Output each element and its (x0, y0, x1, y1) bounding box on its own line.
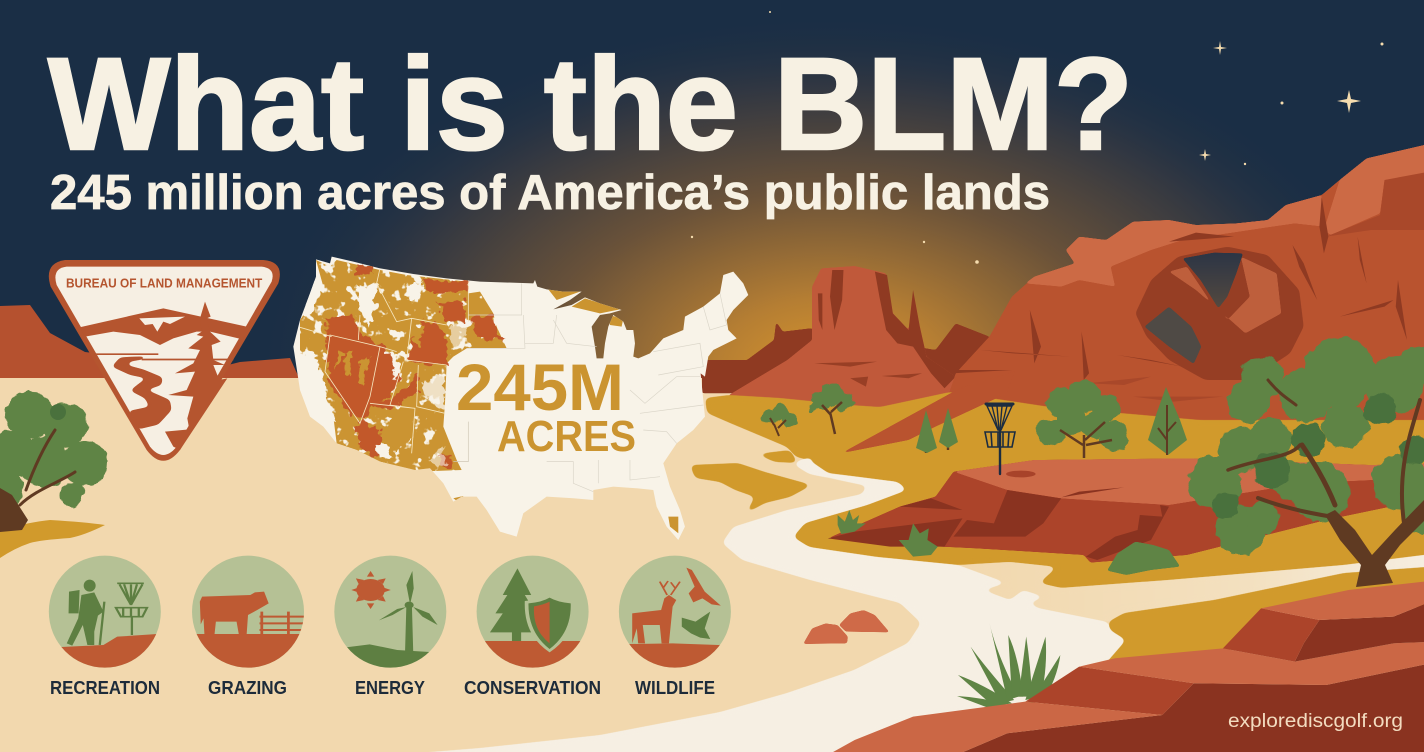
tree: pair of pines (916, 408, 958, 453)
white gaps (303, 280, 467, 470)
western state lines (300, 268, 468, 453)
tree: oak (1036, 380, 1129, 458)
gold northern Great Lakes (453, 289, 678, 533)
label: wildlife: WILDLIFE (635, 678, 715, 698)
land use icons row (48, 556, 737, 698)
tree: conifer right (1148, 387, 1187, 455)
disc golf basket target (985, 404, 1015, 474)
label: grazing: GRAZING (208, 678, 287, 698)
icon: conservation (476, 556, 589, 668)
arch opening lower (1144, 307, 1201, 364)
tree: far small left (763, 404, 797, 436)
logo lines (95, 353, 233, 360)
icon: wildlife (618, 556, 731, 668)
title: What is the BLM? (48, 30, 1133, 177)
BLM shield logo (49, 260, 280, 461)
logo snowcap (139, 317, 185, 332)
gold blob on sand (690, 463, 812, 514)
label: recreation: RECREATION (50, 678, 160, 698)
USA map (293, 257, 748, 540)
trunk (1325, 500, 1424, 587)
rock body (944, 142, 1424, 440)
icon: grazing (192, 556, 304, 668)
map figure: 245M: 245M (456, 350, 624, 424)
stars (691, 11, 1384, 264)
plateau body (828, 458, 1424, 563)
rust slope behind pines (841, 370, 1016, 453)
small gold patch by river (756, 450, 798, 463)
night sky background (0, 0, 1424, 420)
mid ground golden land (705, 392, 1424, 588)
plateau shadow (828, 487, 1169, 560)
eastern state lines (467, 283, 727, 492)
left gold patch (0, 520, 105, 558)
sunset glow (150, 0, 1424, 420)
land outline (293, 257, 748, 540)
cracks (953, 197, 1407, 380)
arch opening upper (1182, 253, 1243, 308)
logo mountains (79, 308, 250, 345)
icon: energy (333, 556, 450, 672)
lit upper faces (1025, 195, 1324, 287)
river main (380, 418, 1126, 752)
agave plant (957, 623, 1060, 708)
shaded arch interior (1135, 247, 1304, 380)
horizon band behind map (680, 360, 800, 380)
large foreground tree (1188, 336, 1424, 587)
logo agency name: BUREAU OF LAND MANAGEMENT (66, 277, 263, 291)
far mesa (702, 322, 989, 393)
left horizon mesa (0, 305, 300, 380)
front rock ledges (819, 580, 1424, 752)
label: conservation: CONSERVATION (464, 678, 601, 698)
subtitle: 245 million acres of America’s public lands (50, 166, 1050, 220)
lower gold land (1100, 566, 1424, 670)
map label: acres: ACRES (497, 412, 636, 461)
small trees (763, 380, 1187, 458)
label: energy: ENERGY (355, 678, 425, 698)
branches (1228, 380, 1420, 530)
left foreground tree (0, 391, 108, 532)
website credit: explorediscgolf.org (1228, 711, 1403, 732)
canopy (1188, 336, 1424, 555)
public land rust areas (327, 265, 505, 468)
tree: far second (808, 383, 854, 434)
small agave plants and shrub (838, 510, 1180, 575)
arch rock formation (944, 142, 1424, 440)
logo river (112, 356, 172, 429)
public land gold areas (300, 260, 507, 472)
central plateau (828, 458, 1424, 563)
sand ground (0, 378, 1424, 752)
butte (729, 266, 956, 417)
logo pine tree (165, 302, 227, 450)
river tributary (958, 553, 1424, 622)
gold highlights over rust (335, 325, 423, 450)
icon: recreation (48, 556, 168, 672)
plateau top (953, 458, 1424, 505)
small rocks on sand (803, 610, 890, 644)
